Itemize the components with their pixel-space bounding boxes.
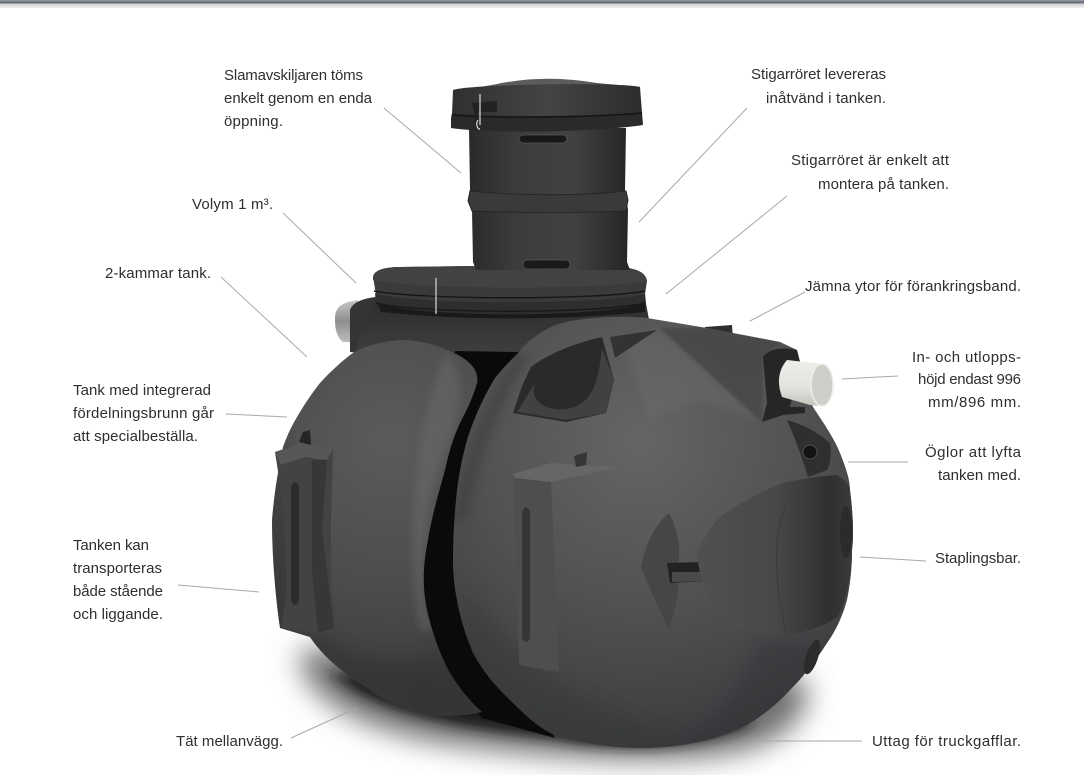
metal clip	[435, 278, 437, 314]
riser pipe	[468, 128, 630, 270]
label: riser delivered: inåtvänd i tanken.	[766, 90, 886, 107]
label: riser mounting: Stigarröret är enkelt att	[791, 152, 950, 169]
label: riser mounting: montera på tanken.	[818, 176, 949, 193]
right handle	[513, 452, 622, 672]
label: transport: och liggande.	[73, 606, 163, 623]
forklift slot	[801, 638, 823, 676]
stacking dome	[697, 475, 853, 635]
left inlet pipe	[335, 297, 392, 356]
label: riser delivered: Stigarröret levereras	[751, 66, 886, 83]
label: chambers: 2-kammar tank.	[105, 265, 211, 282]
black gap between chambers	[415, 351, 555, 738]
label: lifting eyes: Öglor att lyfta	[925, 443, 1022, 461]
lifting side lens and slot	[641, 513, 705, 630]
label: distribution well: fördelningsbrunn går	[73, 405, 214, 422]
label: inlet outlet height: mm/896 mm.	[928, 394, 1021, 411]
left chamber	[270, 340, 482, 716]
label: distribution well: att specialbeställa.	[73, 428, 198, 445]
top recess	[513, 330, 657, 422]
label: riser delivered	[751, 66, 886, 107]
label: transport: både stående	[73, 583, 163, 600]
label: anchoring: Jämna ytor för förankringsband.	[805, 278, 1021, 295]
label: volume: Volym 1 m³.	[192, 196, 273, 213]
lifting eye	[787, 420, 831, 477]
rear fitting on right chamber	[705, 325, 733, 340]
lower slot	[523, 260, 570, 269]
ground shadow	[300, 640, 807, 760]
label: emptying: enkelt genom en enda	[224, 90, 373, 107]
product photo: septic tank	[73, 66, 1022, 760]
label: lifting eyes: tanken med.	[938, 467, 1021, 484]
right chamber	[453, 317, 853, 752]
label: emptying: öppning.	[224, 113, 283, 130]
tank neck	[352, 298, 650, 362]
label: emptying: Slamavskiljaren töms	[224, 67, 363, 84]
label: partition wall: Tät mellanvägg.	[176, 733, 283, 750]
white outlet pipe	[762, 349, 833, 422]
label: inlet outlet height: In- och utlopps-	[912, 349, 1021, 366]
label: distribution well: Tank med integrerad	[73, 382, 211, 399]
label: emptying	[224, 67, 373, 130]
riser rib	[468, 191, 628, 212]
upper slot	[519, 135, 567, 143]
browser top bar	[0, 0, 1084, 8]
label: inlet outlet height	[912, 349, 1021, 411]
tank collar flange	[373, 266, 647, 318]
label: riser mounting	[791, 152, 950, 193]
left handle	[275, 430, 338, 634]
label: lifting eyes	[925, 443, 1022, 484]
label: stackable: Staplingsbar.	[935, 550, 1021, 567]
leader lines	[178, 108, 926, 741]
label: transport: transporteras	[73, 560, 162, 577]
label: forklift: Uttag för truckgafflar.	[872, 733, 1021, 750]
label: transport	[73, 537, 163, 623]
label: distribution well	[73, 382, 214, 445]
label: inlet outlet height: höjd endast 996	[918, 371, 1021, 388]
label: transport: Tanken kan	[73, 537, 149, 554]
riser lid	[451, 79, 643, 132]
